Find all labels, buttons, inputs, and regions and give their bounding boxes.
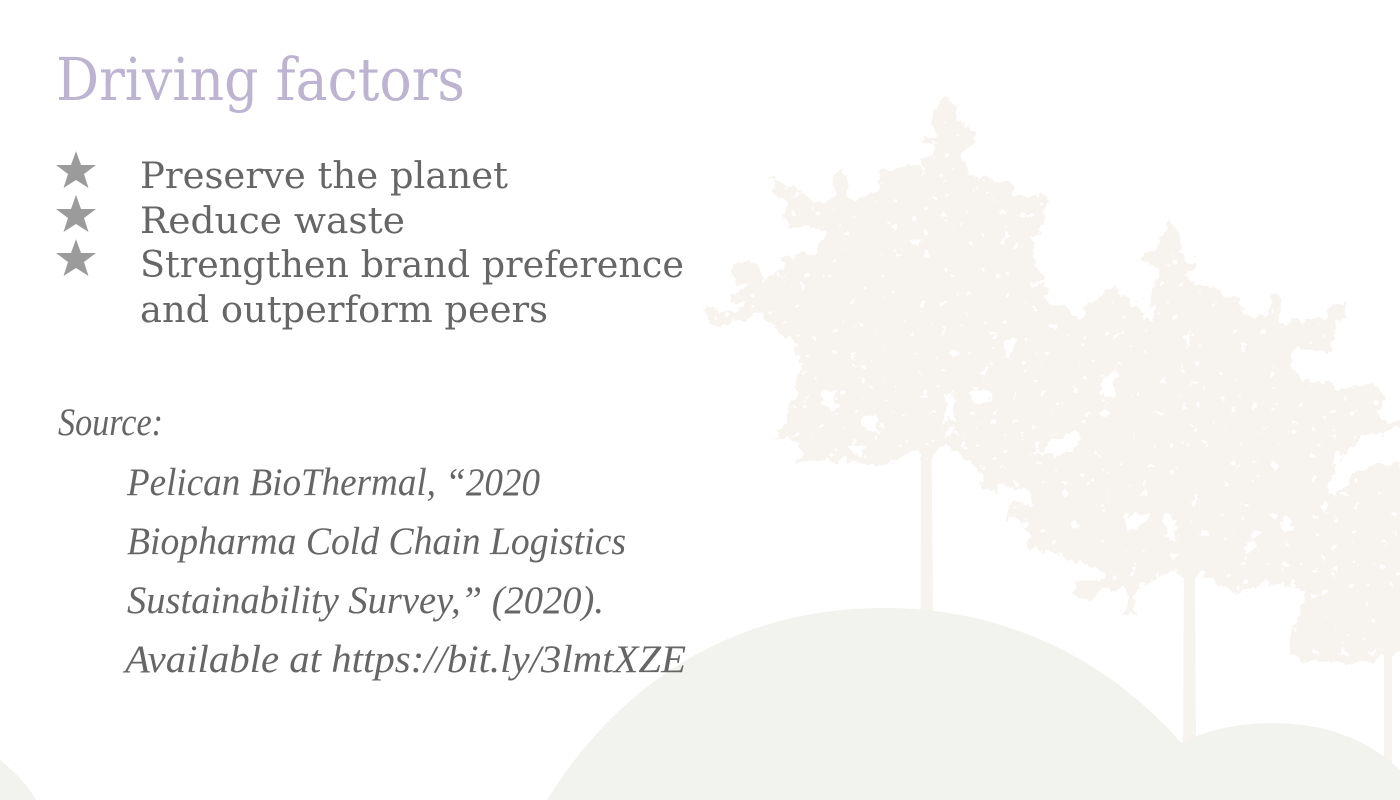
bullet text: strengthen brand preference: and outperform peers <box>140 290 548 331</box>
bullet list: driving factors <box>56 151 684 331</box>
source citation: Sustainability Survey,” (2020). <box>127 579 604 622</box>
bullet text: strengthen brand preference: Strengthen brand preference <box>140 245 684 286</box>
foliage gaps <box>820 239 1400 554</box>
source citation: Source: <box>58 401 163 444</box>
bullet text: strengthen brand preference <box>140 245 684 331</box>
tree canopies <box>703 95 1400 663</box>
tree trunks <box>920 445 1392 765</box>
source citation <box>58 401 686 681</box>
illustration: tree silhouettes <box>703 95 1400 765</box>
source citation: Available at https://bit.ly/3lmtXZE <box>122 638 686 681</box>
icon: star <box>56 239 96 276</box>
source citation: Biopharma Cold Chain Logistics <box>127 520 626 563</box>
hill: bottom-left corner <box>0 760 36 800</box>
bullet text: preserve the planet: Preserve the planet <box>140 156 509 197</box>
source citation: Pelican BioThermal, “2020 <box>126 461 540 504</box>
bullet text: reduce waste: Reduce waste <box>140 201 405 242</box>
title: Driving factors <box>56 45 465 114</box>
hill: center-right <box>547 608 1240 800</box>
icon: star <box>56 195 96 232</box>
hill: far right <box>1112 723 1400 800</box>
icon: star <box>56 151 96 188</box>
